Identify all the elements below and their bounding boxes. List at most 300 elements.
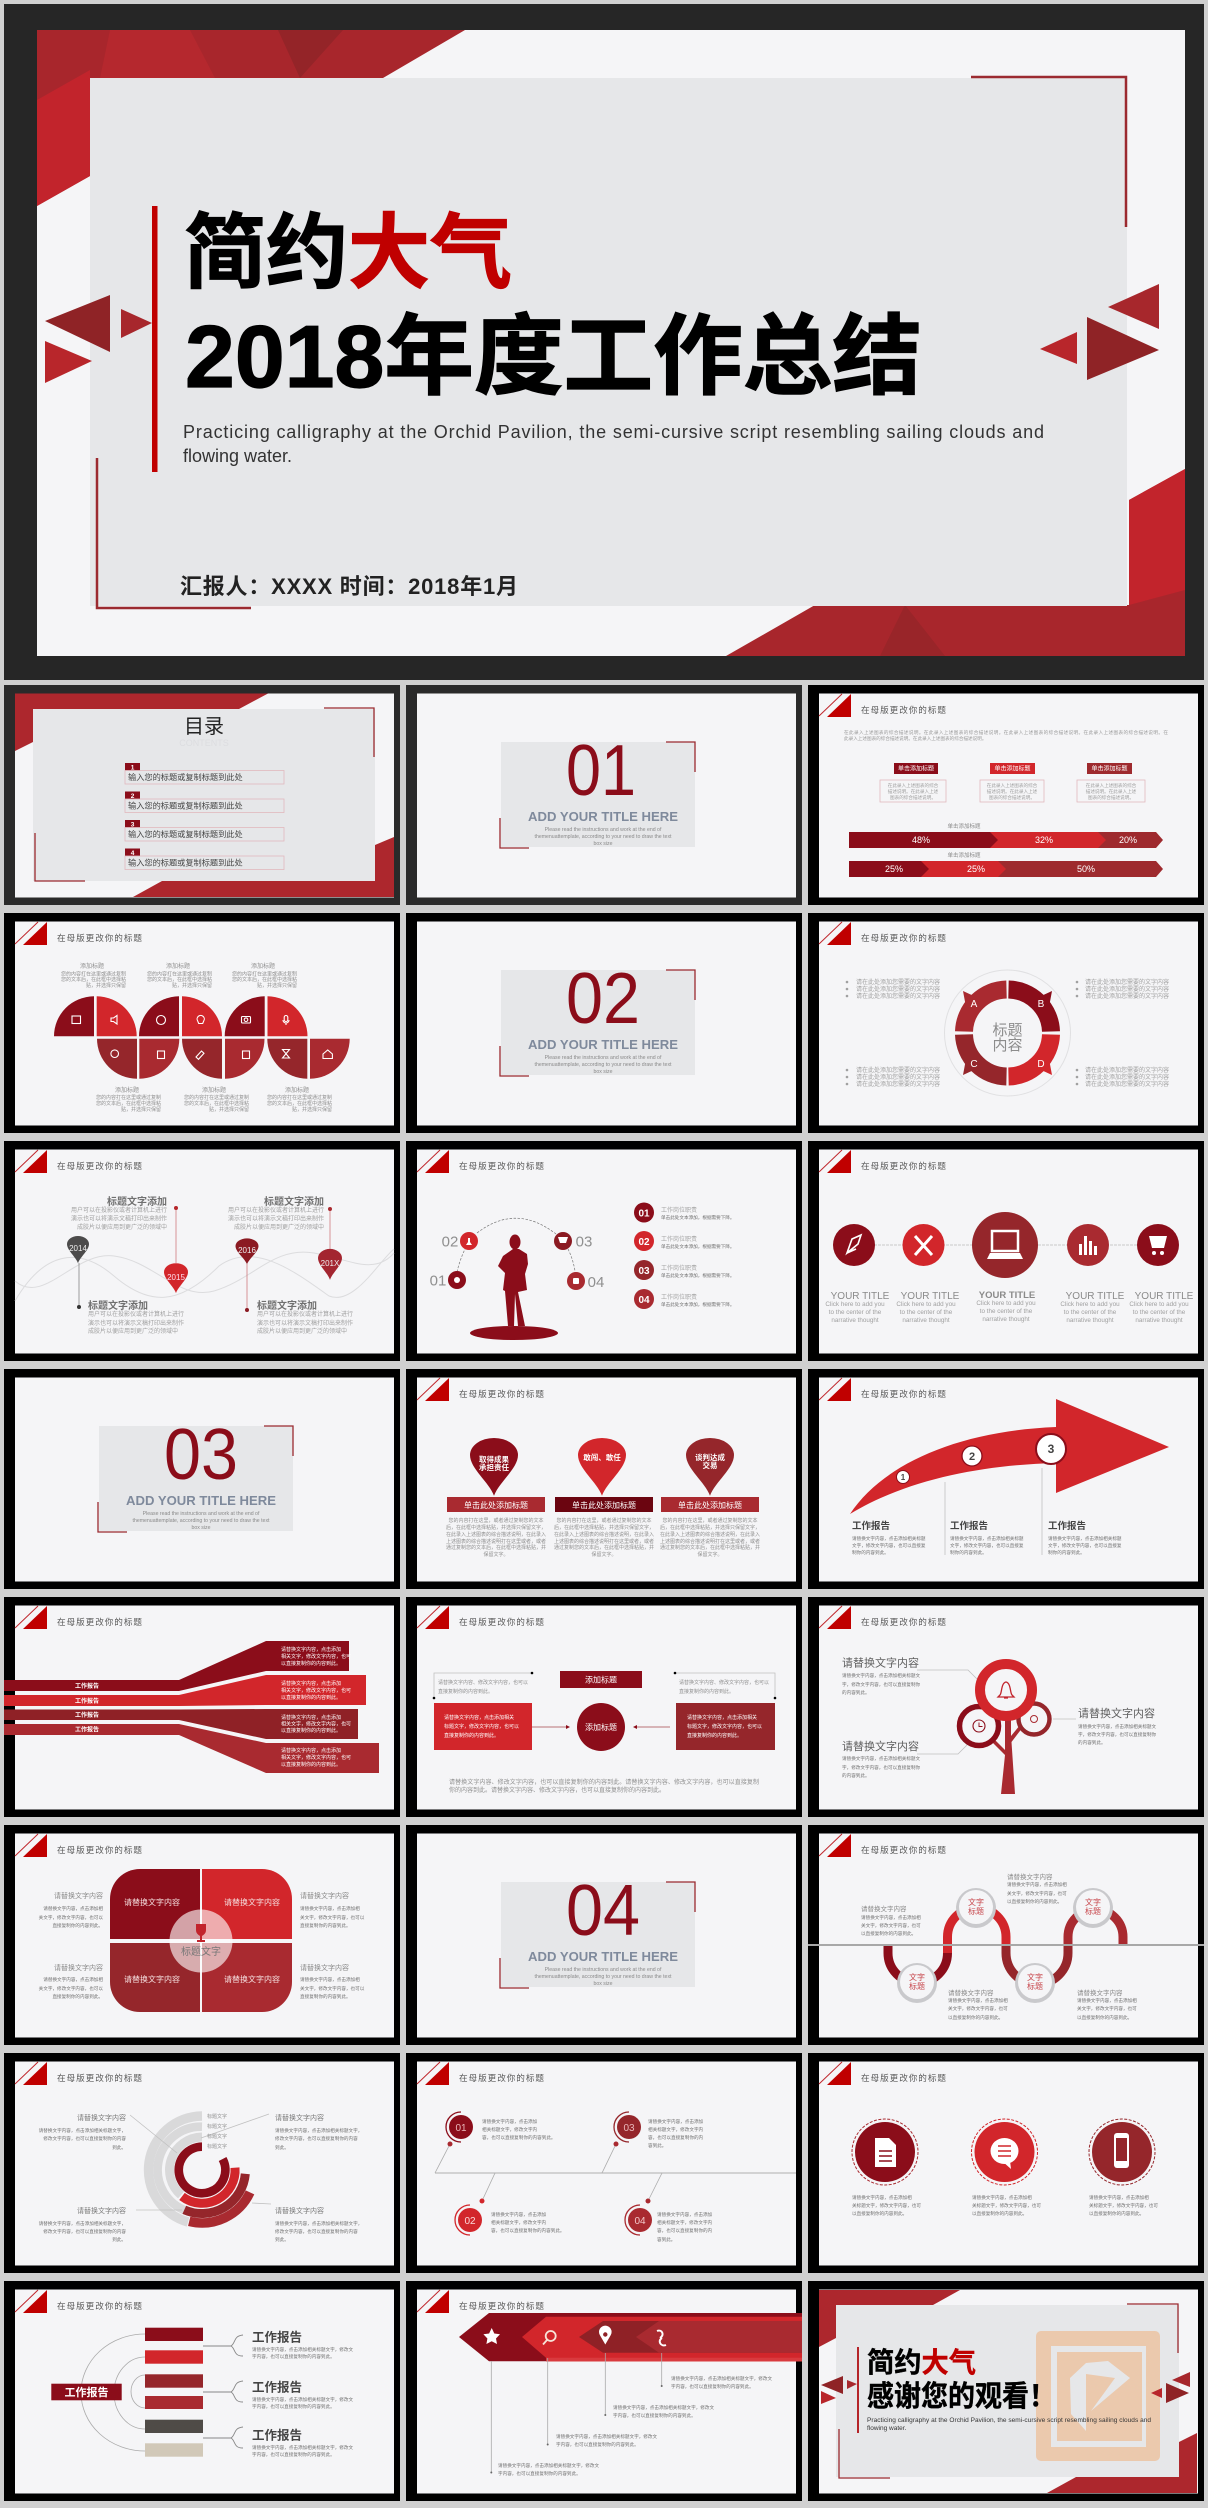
- strip 1: 以直接复制你的内容到此。: [281, 1660, 341, 1667]
- text top-left: 修改文字内容，也可以直接复制你的内容: [43, 2135, 126, 2142]
- brackets: [98, 1426, 293, 1532]
- text 2: 请替换文字内容，点击添加相关标题文字，修改文: [556, 2433, 657, 2440]
- text bottom-middle: 请替换文字内容，点击添加相: [948, 1997, 1008, 2004]
- brackets: [35, 708, 374, 881]
- ring labels: 标题文字: [207, 2113, 227, 2120]
- strip 4: 工作报告: [75, 1726, 99, 1734]
- strip 4: 相关文字，修改文字内容，也可: [281, 1754, 351, 1761]
- column titles: YOUR TITLE: [831, 1291, 890, 1302]
- column descriptions: to the center of the: [1064, 1309, 1117, 1316]
- title line 2: 感谢您的观看！: [867, 2380, 1056, 2413]
- item 3: [125, 820, 284, 841]
- column text: 通过复制您的文本后，在此框中选择粘贴，并: [446, 1544, 546, 1551]
- bullet text: 请在此处添加您需要的文字内容: [856, 1073, 940, 1081]
- section description: Please read the instructions and work at the end of: [545, 1055, 662, 1061]
- node 1: 文字: [909, 1972, 925, 1982]
- text block bottom-left: 成胶片以便应用到更广泛的领域中: [88, 1327, 178, 1335]
- label bottom-left: [842, 1739, 921, 1779]
- top labels: 贴，并选择只保留: [172, 982, 212, 989]
- grey rings: [149, 2116, 202, 2222]
- text 4: 字内容，也可以直接复制你的内容到此。: [671, 2383, 754, 2390]
- column descriptions: to the center of the: [1133, 1309, 1186, 1316]
- column text: 后，在此框中选择粘贴，并选择只保留文字，: [446, 1524, 546, 1531]
- text block top-right: 用户可以在投影仪或者计算机上进行: [228, 1206, 324, 1214]
- slide header: 在母版更改你的标题: [459, 2072, 544, 2083]
- column text: 上述图表的综合描述说明打在这里或者，或者: [660, 1538, 760, 1545]
- milestone 04: 容到此。: [657, 2236, 675, 2243]
- section description: [535, 1055, 672, 1075]
- text top-left: 请替换文字内容，点击添加相关标题文字，: [39, 2127, 126, 2134]
- ring labels: [207, 2113, 227, 2150]
- text top-middle: 请替换文字内容: [1007, 1872, 1053, 1881]
- text block bottom-right: 标题文字添加: [257, 1299, 317, 1312]
- top labels: [61, 962, 297, 989]
- connectors: [917, 1670, 1076, 1754]
- top circle with bell: [980, 1664, 1032, 1716]
- subtitle: [867, 2417, 1151, 2432]
- text block top-left: 用户可以在投影仪或者计算机上进行: [71, 1206, 167, 1214]
- slide header: 在母版更改你的标题: [57, 932, 142, 943]
- section description: Please read the instructions and work at the end of: [143, 1511, 260, 1517]
- label right: [1078, 1706, 1157, 1746]
- list item 04: 04: [638, 1295, 650, 1306]
- list item 03: 03: [638, 1266, 650, 1277]
- side text top-right: 关文字，修改文字内容，也可以: [300, 1914, 365, 1921]
- bullet text: 请在此处添加您需要的文字内容: [856, 985, 940, 993]
- horizontal rule: [808, 1944, 1204, 1946]
- text top-left: 请替换文字内容: [77, 2113, 126, 2122]
- pin 2016: 2016: [238, 1246, 256, 1255]
- list item 03: [634, 1260, 735, 1280]
- text bottom-right: 以直接复制你的内容到此。: [1077, 2014, 1132, 2021]
- description text: [888, 782, 1137, 801]
- pin 2014: [67, 1236, 89, 1263]
- pin 3: 谈判达成: [695, 1452, 725, 1462]
- text top-middle: 以直接复制你的内容到此。: [1007, 1898, 1062, 1905]
- right dark box: 请替换文字内容，点击添加相关: [687, 1714, 757, 1721]
- bottom labels: [96, 1086, 332, 1113]
- source box: [51, 2384, 122, 2400]
- pin 2016: [236, 1238, 258, 1264]
- text block bottom-left: 标题文字添加: [88, 1299, 148, 1312]
- grey card: [836, 2305, 1179, 2477]
- triangles right: [1151, 2372, 1190, 2403]
- slide header: [819, 1378, 946, 1401]
- section description: themenuattemplate, according to your need to draw the text: [535, 834, 672, 840]
- brackets: [500, 970, 695, 1076]
- text block top-left: 演示也可以将演示文稿打印出来制作: [71, 1214, 167, 1222]
- bottom labels: 贴，并选择只保留: [209, 1106, 249, 1113]
- step 3: 3: [1048, 1442, 1055, 1456]
- text bottom-middle: [948, 1988, 1008, 2021]
- node 3: [1015, 1963, 1055, 2003]
- ring labels: 标题文字: [207, 2133, 227, 2140]
- bottom labels: 您的文本后，在此框中选择粘: [184, 1100, 249, 1107]
- label right: 字，修改文字内容，也可以直接复制你: [1078, 1731, 1157, 1738]
- text bottom-right: 请替换文字内容: [1077, 1988, 1123, 1997]
- text 1: 请替换文字内容，点击添加相关标题文字，修改文: [498, 2462, 599, 2469]
- bottom quarter discs: [97, 1039, 350, 1079]
- red corners: [819, 2290, 1197, 2493]
- slide header: 在母版更改你的标题: [459, 1160, 544, 1171]
- milestone 04: 04: [634, 2216, 646, 2227]
- step 2: 2: [969, 1451, 975, 1463]
- node 3: 文字: [1027, 1972, 1043, 1982]
- text top-right: 请替换文字内容，点击添加相关标题文字，: [275, 2127, 362, 2134]
- section number: 01: [566, 731, 636, 811]
- text bottom-right: 请替换文字内容，点击添加相: [1077, 1997, 1137, 2004]
- text block bottom-left: 用户可以在投影仪或者计算机上进行: [88, 1310, 184, 1318]
- column text: 通过复制您的文本后，在此框中选择粘贴，并: [660, 1544, 760, 1551]
- caption 1: 以直接复制你的内容到此。: [852, 2210, 907, 2217]
- list item 01: 单击此处文本添加，根据需要下降。: [661, 1214, 735, 1221]
- column descriptions: narrative thought: [1066, 1317, 1114, 1324]
- red corner top-left: [37, 30, 465, 206]
- subtitle: [183, 422, 1044, 466]
- red corner bottom-right: [726, 469, 1185, 656]
- column text: 在此录入上述图表的综合描述说明，在此录入: [554, 1531, 654, 1538]
- report 3: 文字，修改文字内容，也可以直接复: [1048, 1542, 1122, 1549]
- title line 1: 简约大气: [867, 2347, 976, 2378]
- panel: section 02: [406, 913, 802, 1133]
- node 3: 标题: [1027, 1981, 1043, 1991]
- column titles: YOUR TITLE: [901, 1291, 960, 1302]
- milestone 03: 容到此。: [648, 2142, 666, 2149]
- node 2: 标题: [968, 1906, 984, 1916]
- section description: themenuattemplate, according to your need to draw the text: [535, 1062, 672, 1068]
- milestone 01: 01: [455, 2123, 467, 2134]
- report 1: 请替换文字内容，点击添加相关标题文字，修改文: [252, 2346, 353, 2353]
- stems: [491, 2353, 662, 2473]
- text top-right: 修改文字内容，也可以直接复制你的内容: [275, 2135, 358, 2142]
- arrow bar 1: 48%: [912, 835, 930, 845]
- centre text: 标题: [992, 1022, 1023, 1039]
- report 3: [1048, 1520, 1122, 1556]
- milestone 03: 相关标题文字，修改文字内: [648, 2126, 704, 2133]
- top labels: 您的内容打在这里或通过复制: [232, 970, 297, 978]
- description text: 图表的综合描述说明。: [1088, 794, 1134, 801]
- left red box: [434, 1703, 532, 1750]
- report 2: 文字，修改文字内容，也可以直接复: [950, 1542, 1024, 1549]
- strip 3: 以直接复制你的内容到此。: [281, 1727, 341, 1734]
- panel: contents slide: [4, 685, 400, 905]
- step 2: [962, 1446, 982, 1466]
- description text: 图表的综合描述说明。: [890, 794, 936, 801]
- icon circle: chat: [972, 2119, 1038, 2185]
- pin 201X: 201X: [321, 1259, 340, 1268]
- bottom labels: 添加标题: [202, 1086, 226, 1094]
- slide header: 在母版更改你的标题: [861, 1844, 946, 1855]
- text top-left: [39, 2113, 126, 2151]
- report 3: 工作报告: [252, 2428, 302, 2442]
- column descriptions: narrative thought: [831, 1317, 879, 1324]
- subtitle: Practicing calligraphy at the Orchid Pavilion, the semi-cursive script resembling sailing clouds and: [867, 2417, 1151, 2424]
- node 02: [442, 1232, 478, 1250]
- slide header: 在母版更改你的标题: [459, 1616, 544, 1627]
- label bottom-left: 的内容到此。: [842, 1772, 870, 1779]
- text block top-right: [228, 1195, 324, 1231]
- slide header: [819, 694, 946, 717]
- strip 2: [4, 1675, 366, 1706]
- intro paragraph: 在此录入上述图表的综合描述说明。在此录入上述图表的综合描述说明。在此录入上述图表的综合描述说明。在此录入上述图表的综合描述说明。在: [844, 729, 1168, 736]
- text top-left: 到此。: [112, 2144, 126, 2151]
- right dark box: 标题文字，修改文字内容，也可以: [687, 1723, 762, 1730]
- section description: themenuattemplate, according to your need to draw the text: [133, 1518, 270, 1524]
- pin 1: 承担责任: [479, 1462, 509, 1472]
- report 3: 请替换文字内容，点击添加相关标题: [1048, 1535, 1122, 1542]
- column text: 保留文字。: [591, 1551, 617, 1558]
- corner bracket top-right: [971, 77, 1126, 227]
- reporter line: 汇报人：XXXX 时间：2018年1月: [180, 574, 518, 599]
- side text bottom-right: 关文字，修改文字内容，也可以: [300, 1985, 365, 1992]
- top labels: 贴，并选择只保留: [257, 982, 297, 989]
- slide header: [15, 922, 142, 945]
- label top-left: 字，修改文字内容，也可以直接复制你: [842, 1681, 921, 1688]
- subtitle: Practicing calligraphy at the Orchid Pavilion, the semi-cursive script resembling sailing clouds and: [183, 422, 1044, 442]
- label boxes: 单击添加标题: [1091, 765, 1128, 773]
- text bottom-right: [275, 2206, 362, 2243]
- node 2: [956, 1888, 996, 1928]
- section title: ADD YOUR TITLE HERE: [528, 1949, 678, 1964]
- label bottom-left: 字，修改文字内容，也可以直接复制你: [842, 1764, 921, 1771]
- item 4: 输入您的标题或复制标题到此处: [128, 858, 243, 868]
- side text bottom-left: 关文字，修改文字内容，也可以: [39, 1985, 103, 1992]
- report 1: 字内容，也可以直接复制你的内容到此。: [252, 2353, 335, 2360]
- section description: Please read the instructions and work at the end of: [545, 1967, 662, 1973]
- arrow bar 2: 25%: [967, 864, 985, 874]
- text 3: 请替换文字内容，点击添加相关标题文字，修改文: [613, 2404, 714, 2411]
- milestone 02: 相关标题文字，修改文字内: [491, 2219, 547, 2226]
- circle tools: [902, 1224, 944, 1266]
- top quarter discs: [54, 996, 308, 1036]
- text bottom-middle: 关文字，修改文字内容，也可: [948, 2005, 1008, 2012]
- report 1: [252, 2330, 353, 2360]
- text bottom-left: [39, 2206, 126, 2243]
- left circle with clock: [960, 1706, 998, 1746]
- strip 3: 相关文字，修改文字内容，也可: [281, 1720, 351, 1728]
- donut quadrants: [963, 990, 1052, 1076]
- node 03: [554, 1232, 592, 1250]
- circle pencil: [833, 1224, 875, 1266]
- list item 04: 单击此处文本添加，根据需要下降。: [661, 1301, 735, 1308]
- report 2: 制你的内容到此。: [950, 1549, 987, 1556]
- item 4: [125, 848, 284, 870]
- slide header: 在母版更改你的标题: [57, 2072, 142, 2083]
- strip 4: [4, 1724, 379, 1773]
- top labels: 添加标题: [251, 962, 275, 970]
- dividers: [945, 1468, 1042, 1555]
- node 4: 文字: [1085, 1897, 1101, 1907]
- column descriptions: narrative thought: [902, 1317, 950, 1324]
- arrow bar 2: 50%: [1077, 864, 1095, 874]
- left bracket text: [433, 1672, 533, 1699]
- bottom labels: 贴，并选择只保留: [121, 1106, 161, 1113]
- report 2: 工作报告: [252, 2380, 302, 2394]
- column titles: YOUR TITLE: [1066, 1291, 1125, 1302]
- arrow bar 2 label: 单击添加标题: [947, 851, 981, 859]
- report 3: 工作报告: [1048, 1520, 1086, 1532]
- red vertical bar: [152, 206, 158, 472]
- pin 2: 敢闯、敢任: [583, 1452, 621, 1462]
- column text: 您的内容打在这里，或者通过复制您的文本: [662, 1517, 758, 1524]
- arrow bar 2: [849, 861, 1163, 877]
- text top-left: 请替换文字内容，点击添加相: [861, 1914, 921, 1921]
- panel: section 03: [4, 1369, 400, 1589]
- side text bottom-right: [300, 1963, 365, 2000]
- list item 01: [634, 1202, 735, 1222]
- panel: horizontal milestones slide: [406, 2053, 802, 2273]
- item 3: 3: [131, 822, 135, 828]
- caption 2: 关标题文字，修改文字内容，也可: [972, 2202, 1041, 2209]
- label right: 的内容到此。: [1078, 1739, 1106, 1746]
- item 1: [125, 763, 284, 784]
- strip 4: 以直接复制你的内容到此。: [281, 1761, 341, 1768]
- arrow bar 2: 25%: [885, 864, 903, 874]
- colored bars: [145, 2328, 203, 2457]
- top centre box: 添加标题: [585, 1674, 617, 1684]
- text 2: 字内容，也可以直接复制你的内容到此。: [556, 2441, 639, 2448]
- text 3: 字内容，也可以直接复制你的内容到此。: [613, 2412, 696, 2419]
- text block top-left: 标题文字添加: [107, 1195, 167, 1208]
- bullet text: 请在此处添加您需要的文字内容: [1085, 978, 1169, 986]
- label boxes: [894, 763, 1132, 774]
- column text: 您的内容打在这里，或者通过复制您的文本: [448, 1517, 544, 1524]
- right bracket text: 直接复制你的内容到此。: [679, 1688, 734, 1695]
- header bars: 单击此处添加标题: [678, 1500, 742, 1510]
- text top-right: [275, 2113, 362, 2151]
- connectors: [130, 2114, 271, 2210]
- panel: five circles slide: [808, 1141, 1204, 1361]
- text 2: [556, 2433, 657, 2448]
- quadrant letters: [970, 999, 1045, 1070]
- item 1: 1: [131, 764, 135, 772]
- header bars: [447, 1497, 759, 1512]
- connector: [854, 1244, 1158, 1246]
- node 04: [567, 1272, 604, 1291]
- section card: [501, 1882, 695, 1987]
- side text top-right: 直接复制你的内容到此。: [300, 1922, 351, 1929]
- step 1: [896, 1470, 910, 1484]
- column descriptions: Click here to add you: [976, 1300, 1036, 1307]
- milestone 04: 容，也可以直接复制你的内: [657, 2227, 713, 2234]
- text bottom-left: 请替换文字内容: [77, 2206, 126, 2215]
- title line 2: 2018年度工作总结: [185, 307, 922, 406]
- text block bottom-left: [88, 1299, 184, 1335]
- panel: percentage arrows slide: [808, 685, 1204, 905]
- side text bottom-left: [39, 1963, 103, 2000]
- bottom paragraph: [449, 1778, 759, 1794]
- corner bracket bottom-left: [97, 458, 251, 608]
- S-curve tube: [888, 1908, 1123, 1984]
- text bottom-right: 请替换文字内容，点击添加相关标题文字，: [275, 2220, 362, 2227]
- white icons: [72, 1015, 332, 1059]
- circle laptop: [972, 1212, 1038, 1278]
- bottom labels: 您的文本后，在此框中选择粘: [267, 1100, 332, 1107]
- triangles left: [45, 295, 152, 383]
- report 2: 工作报告: [950, 1520, 988, 1532]
- description text: 描述说明。在此录入上述: [1086, 788, 1137, 795]
- right dark box: [676, 1703, 775, 1750]
- panel: concentric arcs slide: [4, 2053, 400, 2273]
- stem lines: [435, 2144, 662, 2201]
- wave lines: [15, 1249, 394, 1301]
- column titles: YOUR TITLE: [979, 1290, 1035, 1301]
- arrow bar 1 label: 单击添加标题: [947, 822, 981, 830]
- report 2: 字内容，也可以直接复制你的内容到此。: [252, 2403, 335, 2410]
- section card: [501, 742, 695, 847]
- list item 02: 单击此处文本添加，根据需要下降。: [661, 1243, 735, 1250]
- header bars: 单击此处添加标题: [572, 1500, 636, 1510]
- bottom labels: 您的内容打在这里或通过复制: [184, 1094, 249, 1101]
- slide header: [417, 1606, 544, 1629]
- text block bottom-right: [257, 1299, 353, 1335]
- bullet text: 请在此处添加您需要的文字内容: [1085, 1073, 1169, 1081]
- top labels: 您的文本后，在此框中选择粘: [147, 976, 212, 983]
- caption 2: 以直接复制你的内容到此。: [972, 2210, 1027, 2217]
- pin 1: 取得成果: [479, 1454, 509, 1464]
- side text top-left: [39, 1891, 103, 1929]
- stems: [77, 1206, 332, 1312]
- column text: [446, 1517, 760, 1558]
- side text top-right: 请替换文字内容: [300, 1891, 349, 1900]
- bullet text: 请在此处添加您需要的文字内容: [1085, 985, 1169, 993]
- bullet text: 请在此处添加您需要的文字内容: [1085, 1080, 1169, 1088]
- pin 2: [578, 1438, 626, 1496]
- panel: mind map slide: [4, 2281, 400, 2501]
- watermark stamp: [1036, 2331, 1160, 2461]
- grey card: [33, 709, 375, 881]
- arrow bar 1: [849, 832, 1163, 848]
- top labels: 贴，并选择只保留: [86, 982, 126, 989]
- slide header: [819, 922, 946, 945]
- section description: Please read the instructions and work at the end of: [545, 827, 662, 833]
- panel: ribbon slide: [406, 2281, 802, 2501]
- bullet text: 请在此处添加您需要的文字内容: [856, 992, 940, 1000]
- bullet text: 请在此处添加您需要的文字内容: [1085, 992, 1169, 1000]
- text top-right: 请替换文字内容: [275, 2113, 324, 2122]
- column text: 后，在此框中选择粘贴，并选择只保留文字，: [660, 1524, 760, 1531]
- right circle with clock: [1018, 1704, 1050, 1734]
- milestone 01: 相关标题文字，修改文字内: [482, 2126, 538, 2133]
- side text bottom-right: 请替换文字内容: [300, 1963, 349, 1972]
- text 1: 字内容，也可以直接复制你的内容到此。: [498, 2470, 581, 2477]
- stem end dots: [490, 2385, 663, 2474]
- milestone 02: [455, 2198, 565, 2235]
- item 2: 2: [131, 793, 135, 800]
- list item 02: 工作岗位职责: [661, 1235, 697, 1243]
- strip 2: 以直接复制你的内容到此。: [281, 1694, 341, 1701]
- bullet text: 请在此处添加您需要的文字内容: [856, 1080, 940, 1088]
- section description: [535, 827, 672, 847]
- section title: ADD YOUR TITLE HERE: [528, 1037, 678, 1052]
- quadrant letters: B: [1038, 999, 1045, 1010]
- top labels: 您的文本后，在此框中选择粘: [232, 976, 297, 983]
- pin 1: [470, 1438, 518, 1496]
- text block bottom-right: 用户可以在投影仪或者计算机上进行: [257, 1310, 353, 1318]
- strip 3: 请替换文字内容，点击添加: [281, 1714, 341, 1721]
- slide header: 在母版更改你的标题: [459, 2300, 544, 2311]
- person silhouette: [470, 1234, 558, 1340]
- left red box: 标题文字，修改文字内容，也可以: [444, 1723, 519, 1730]
- brackets: [839, 2304, 1178, 2478]
- side text top-left: 请替换文字内容，点击添加相: [43, 1905, 103, 1912]
- grey title card: [90, 78, 1127, 606]
- quadrant labels: [124, 1897, 280, 1984]
- slide header: [15, 2290, 142, 2313]
- text top-middle: [1007, 1872, 1067, 1905]
- panel: fanning strips slide: [4, 1597, 400, 1817]
- brackets: [500, 742, 695, 848]
